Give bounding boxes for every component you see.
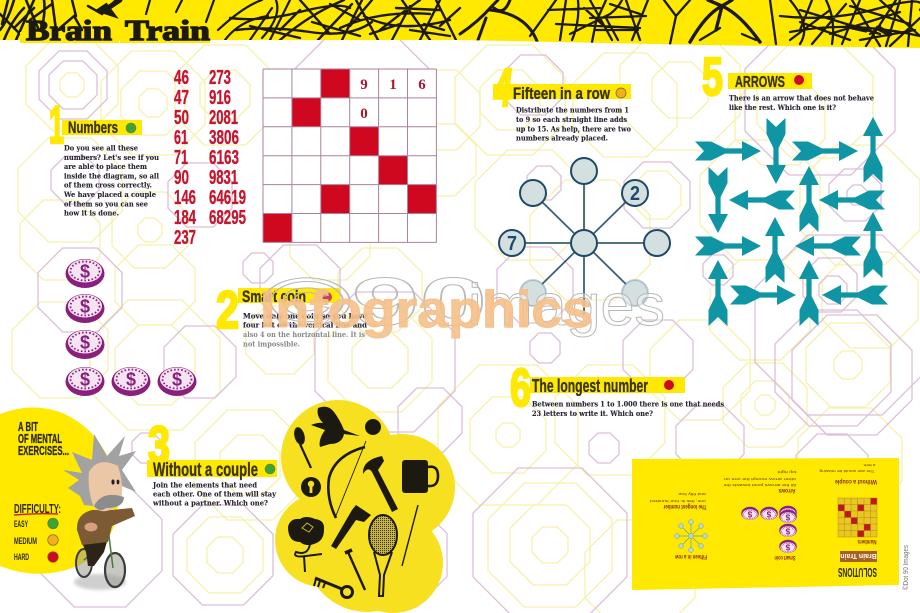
heading: longest number: The longest number xyxy=(532,376,648,396)
heading: fifteen in a row: Fifteen in a row xyxy=(513,84,611,103)
text: numbers instructions xyxy=(63,144,160,218)
text: fifteen instructions xyxy=(516,106,631,142)
heading: without a couple xyxy=(147,416,277,481)
watermark xyxy=(260,264,665,340)
coins xyxy=(66,259,196,396)
icon: keyhole xyxy=(301,477,321,497)
text: fifteen instructions: numbers already placed. xyxy=(516,134,608,142)
panel: 1 numbers xyxy=(49,67,436,249)
number list: 6163 xyxy=(209,147,239,169)
solution: smart coin: Smart coin xyxy=(774,554,796,560)
icon: bow xyxy=(328,441,366,518)
yellow blob with silhouettes xyxy=(275,400,455,613)
text: numbers instructions: of them cross correctly. xyxy=(64,180,152,190)
solution: smart coin xyxy=(741,506,797,560)
heading: without a couple: 3 xyxy=(148,416,170,475)
difficulty legend: HARD xyxy=(14,552,29,562)
heading: without a couple: Without a couple xyxy=(153,460,258,481)
text: longest number instructions: Between numbers 1 to 1.000 there is one that needs xyxy=(532,400,724,408)
heading: smart coin: 2 xyxy=(216,281,239,340)
heading: solutions: SOLUTIONS xyxy=(838,565,877,580)
header band with thorns xyxy=(0,0,920,50)
number list: 3806 xyxy=(209,127,239,149)
number list: 61 xyxy=(174,127,188,149)
icon: rose xyxy=(288,517,324,572)
text: fifteen instructions: to 9 so each straight line adds xyxy=(516,115,627,124)
number list: 47 xyxy=(174,87,189,109)
heading: fifteen in a row xyxy=(493,58,631,118)
text: arrows instructions xyxy=(729,94,874,112)
number list: 184 xyxy=(174,207,197,229)
text: a bit of mental exercises: OF MENTAL xyxy=(18,431,62,446)
number list xyxy=(174,67,246,249)
illustration: einstein on a bicycle xyxy=(63,434,136,590)
solution: without a couple: a tree. xyxy=(862,463,876,467)
text: numbers instructions: of them so you can see xyxy=(64,200,148,208)
watermark: images xyxy=(468,273,665,338)
number list: 71 xyxy=(174,147,188,169)
solution: arrows: Arrows xyxy=(778,487,796,493)
heading: smart coin xyxy=(216,281,340,340)
number list: 273 xyxy=(209,67,231,89)
text: smart coin instructions xyxy=(243,312,367,348)
star diagram xyxy=(499,158,670,315)
solution: arrows xyxy=(724,470,796,493)
solution: numbers xyxy=(838,498,877,544)
solution: fifteen in a row: Fifteen in a row xyxy=(675,553,707,559)
title xyxy=(20,15,210,47)
number list: 50 xyxy=(174,107,189,129)
difficulty legend: EASY xyxy=(14,519,28,529)
panel: solutions (upside down) xyxy=(632,458,899,590)
text: longest number instructions xyxy=(532,400,724,418)
heading: longest number xyxy=(510,358,685,418)
heading: arrows xyxy=(702,47,812,107)
solution: arrows: other arrow except the one on xyxy=(724,477,796,481)
text: without a couple instructions: Join the elements that need xyxy=(152,480,257,490)
text: longest number instructions: 23 letters to write it. Which one? xyxy=(532,409,653,418)
text: smart coin instructions: not impossible. xyxy=(243,340,300,348)
star diagram: 2 xyxy=(630,183,640,205)
watermark: Infographics xyxy=(260,281,593,339)
crossword grid: 0 xyxy=(360,106,368,122)
label: brain train: Brain Train xyxy=(840,552,877,559)
difficulty legend: MEDIUM xyxy=(14,536,37,546)
panel: 2 smart coin xyxy=(66,259,367,396)
number list: 916 xyxy=(209,87,231,109)
icon: nail xyxy=(345,550,365,590)
text: numbers instructions: Do you see all these xyxy=(64,144,138,152)
text: smart coin instructions: four left on the vertical line and xyxy=(243,320,367,330)
solution: without a couple xyxy=(820,463,877,484)
solution: without a couple: The axe would be missing xyxy=(820,469,874,473)
title: Train xyxy=(125,15,210,47)
solution: arrows: top right xyxy=(778,470,796,474)
text: smart coin instructions: Move only one coin so you have xyxy=(243,312,367,320)
number list: 46 xyxy=(174,67,189,89)
text: a bit of mental exercises xyxy=(18,419,69,458)
icon: bird xyxy=(311,407,360,447)
heading: arrows: 5 xyxy=(702,47,723,107)
text: numbers instructions: are able to place them xyxy=(64,162,147,171)
solution: numbers: Numbers xyxy=(857,538,876,544)
panel: 4 fifteen in a row xyxy=(493,58,670,315)
text: numbers instructions: numbers? Let's see if you xyxy=(64,153,160,162)
number list: 9831 xyxy=(209,167,238,189)
number list: 237 xyxy=(174,227,196,249)
text: arrows instructions: There is an arrow that does not behave xyxy=(729,94,874,102)
label: brain train xyxy=(840,551,877,562)
heading: longest number: 6 xyxy=(510,358,531,418)
crossword grid xyxy=(263,69,436,242)
solution: longest number xyxy=(650,492,706,509)
text: without a couple instructions: each other. One of them will stay xyxy=(153,490,277,498)
title: Brain xyxy=(26,15,112,47)
icon: arrow line xyxy=(402,505,418,566)
heading: numbers xyxy=(49,96,142,155)
number list: 68295 xyxy=(209,207,246,229)
arrow puzzle xyxy=(695,117,888,326)
text: fifteen instructions: up to 15. As help, there are two xyxy=(516,124,631,134)
number list: 2081 xyxy=(209,107,238,129)
panel: 5 arrows xyxy=(695,47,888,326)
icon: racket xyxy=(369,515,397,596)
text: numbers instructions: We have placed a couple xyxy=(63,190,156,199)
icon: axe xyxy=(331,505,371,549)
crossword grid: 9 xyxy=(360,77,368,93)
panel: difficulty xyxy=(0,407,136,590)
crossword grid: 6 xyxy=(418,77,426,93)
yellow blob xyxy=(0,407,118,574)
watermark: ©90 xyxy=(262,264,487,340)
text: numbers instructions: inside the diagram, so all xyxy=(64,172,159,180)
solution: longest number: and fifty four xyxy=(677,492,706,496)
icon: spoon xyxy=(292,426,311,468)
panel: 3 without a couple xyxy=(147,400,455,613)
icon: hammer xyxy=(363,456,398,512)
text: arrows instructions: like the rest. Which one is it? xyxy=(729,103,836,112)
number list: 90 xyxy=(174,167,189,189)
difficulty legend xyxy=(14,501,61,562)
text: without a couple instructions xyxy=(152,480,277,508)
heading: arrows: ARROWS xyxy=(735,74,785,91)
icon: mug xyxy=(402,460,438,493)
heading: numbers: Numbers xyxy=(68,118,118,137)
credit: ©Dot 90 Images xyxy=(902,545,910,590)
text: a bit of mental exercises: EXERCISES... xyxy=(18,443,69,458)
crossword grid: 1 xyxy=(389,77,397,93)
heading: smart coin: Smart coin xyxy=(242,287,306,306)
solution: longest number: one, this is: four hundred xyxy=(650,499,706,503)
solution: without a couple: Without a couple xyxy=(834,478,877,484)
heading: fifteen in a row: 4 xyxy=(493,58,512,118)
solution: fifteen in a row xyxy=(675,520,707,559)
difficulty legend: DIFFICULTY: xyxy=(14,501,61,516)
text: numbers instructions: how it is done. xyxy=(64,208,119,218)
panel: 6 longest number xyxy=(510,358,724,418)
text: fifteen instructions: Distribute the numbers from 1 xyxy=(516,106,629,114)
solution: arrows: All the arrows point towards the xyxy=(724,483,796,487)
text: without a couple instructions: without a partner. Which one? xyxy=(152,498,268,508)
icon: ball xyxy=(365,419,381,435)
icon: key xyxy=(314,578,352,598)
text: a bit of mental exercises: A BIT xyxy=(18,419,38,434)
text: smart coin instructions: also 4 on the horizontal line. It is xyxy=(243,330,365,339)
number list: 64619 xyxy=(209,187,246,209)
heading: numbers: 1 xyxy=(49,96,64,155)
star diagram: 7 xyxy=(507,233,517,255)
solution: longest number: The longest number xyxy=(663,503,706,509)
number list: 146 xyxy=(174,187,196,209)
